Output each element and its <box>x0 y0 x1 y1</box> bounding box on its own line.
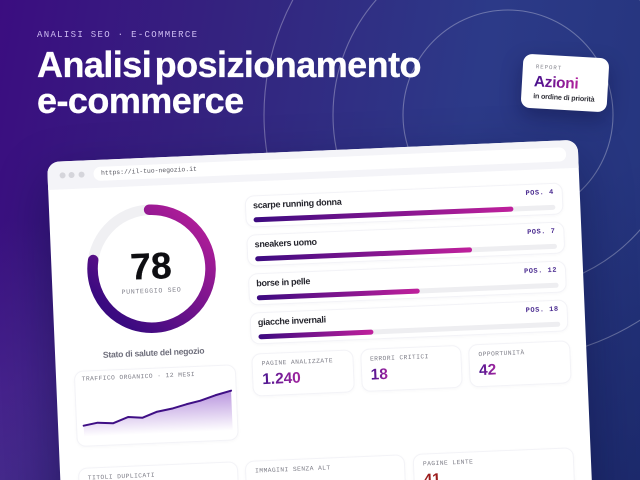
url field <box>93 147 566 181</box>
score caption: Stato di salute del negozio <box>103 345 204 359</box>
stat card: pagine lente <box>412 446 577 480</box>
stat value: 42 <box>479 361 496 379</box>
position: POS. 12 <box>524 266 557 276</box>
keyword row: borse in pelle <box>248 260 567 305</box>
title: Analisi posizionamento <box>37 44 421 85</box>
keyword row: sneakers uomo <box>246 221 565 266</box>
title <box>37 44 421 121</box>
stat value: 1.240 <box>262 369 301 388</box>
stat card: opportunita <box>468 340 571 387</box>
panel: report badge <box>521 53 609 112</box>
panel: traffic chart <box>73 364 238 447</box>
badge eyebrow: REPORT <box>536 63 562 71</box>
stat label: IMMAGINI SENZA ALT <box>255 463 331 474</box>
score gauge <box>87 204 216 333</box>
position: POS. 18 <box>525 305 559 315</box>
position: POS. 7 <box>527 227 555 236</box>
stat card: immagini senza alt <box>244 453 408 480</box>
stat label: PAGINE ANALIZZATE <box>261 357 333 367</box>
line chart <box>82 390 232 434</box>
score value: 78 <box>129 244 172 287</box>
position: POS. 4 <box>525 188 554 197</box>
stat card: titoli duplicati <box>77 460 241 480</box>
keyword row: giacche invernali <box>249 299 568 344</box>
stat label: PAGINE LENTE <box>423 457 473 467</box>
stat label: OPPORTUNITÀ <box>478 349 525 358</box>
chart label: TRAFFICO ORGANICO · 12 MESI <box>81 370 195 382</box>
keyword: giacche invernali <box>257 314 326 327</box>
stat label: ERRORI CRITICI <box>370 353 429 362</box>
keyword row: scarpe running donna <box>244 182 563 227</box>
keyword: borse in pelle <box>256 276 310 288</box>
progress bar <box>255 243 557 261</box>
panel: browser window <box>47 139 595 480</box>
badge heading: Azioni <box>534 73 579 92</box>
progress bar <box>257 282 559 300</box>
keyword: scarpe running donna <box>253 196 341 210</box>
stat card: pagine analizzate <box>251 349 354 396</box>
stat card: errori critici <box>359 344 463 392</box>
window dots <box>60 172 84 178</box>
title: e-commerce <box>37 80 244 121</box>
progress bar <box>258 321 560 339</box>
badge subtext: in ordine di priorità <box>533 91 595 103</box>
browser top bar <box>47 139 579 189</box>
eyebrow label: ANALISI SEO · E-COMMERCE <box>37 30 198 40</box>
progress bar <box>253 204 555 222</box>
score label: PUNTEGGIO SEO <box>121 286 181 295</box>
stat value: 18 <box>370 365 388 383</box>
url field: https://il-tuo-negozio.it <box>101 165 197 176</box>
keyword: sneakers uomo <box>254 236 317 249</box>
